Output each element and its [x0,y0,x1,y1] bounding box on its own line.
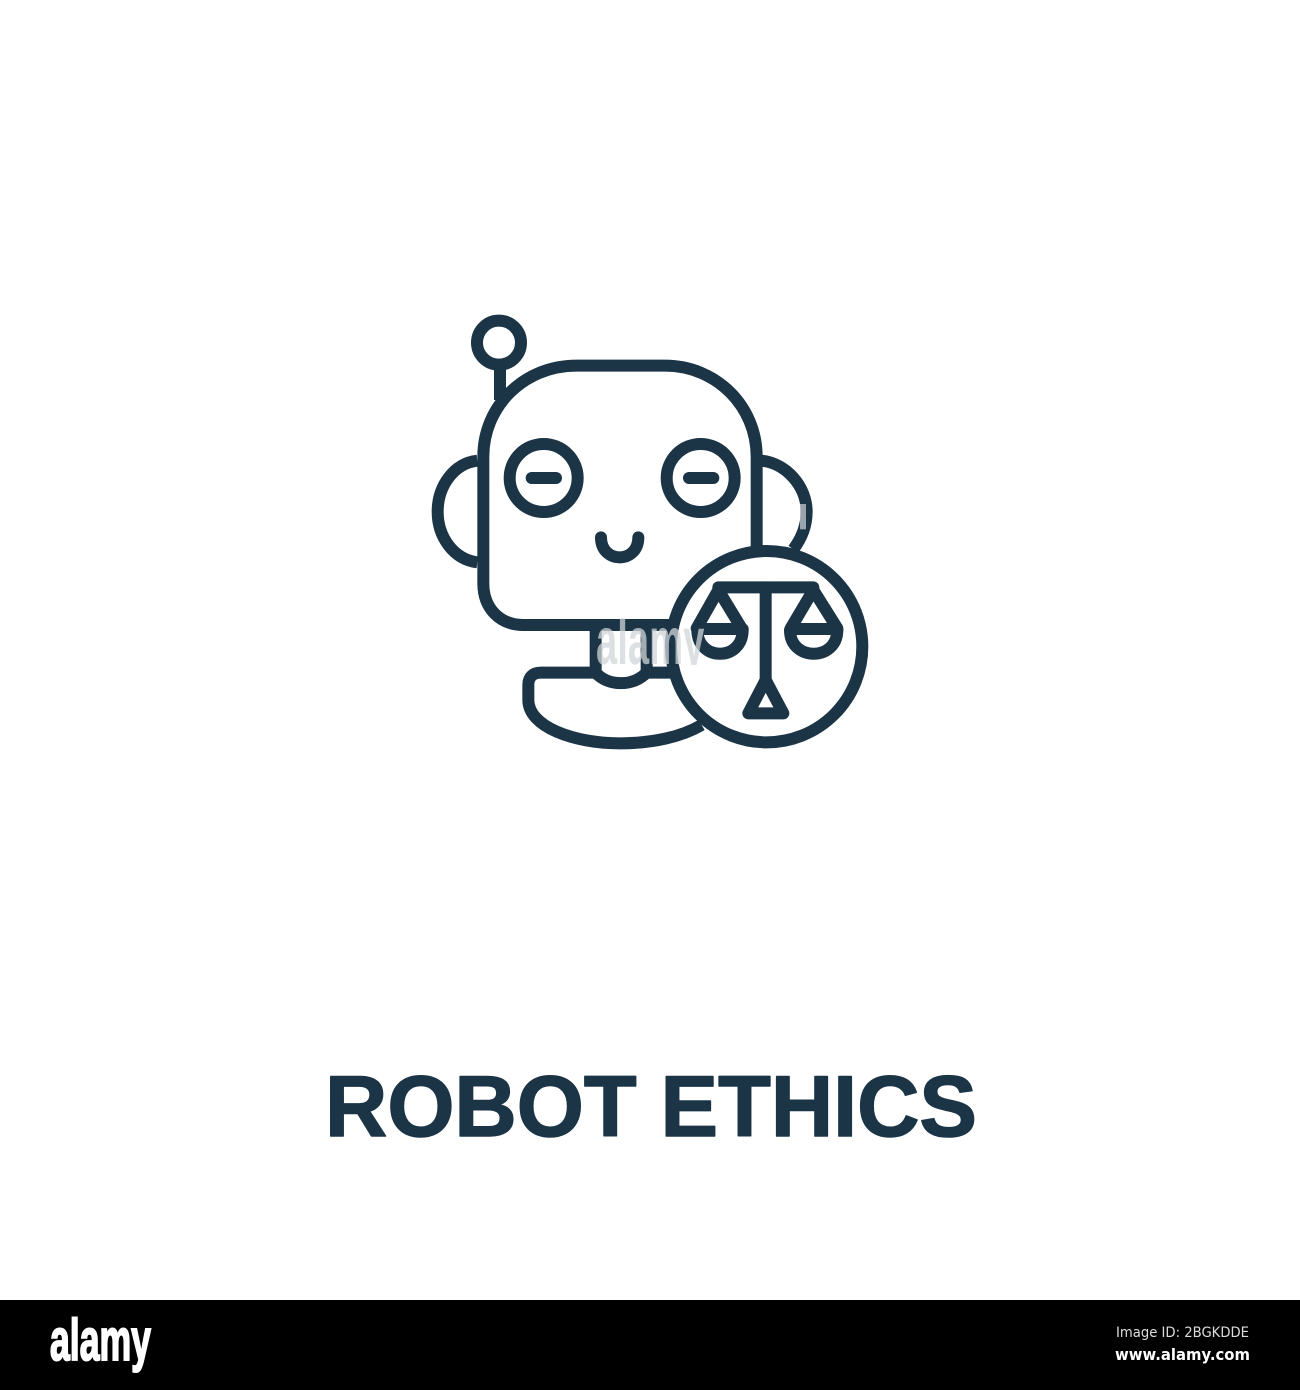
icon: robot ears [438,461,807,562]
icon: robot neck and base [528,630,702,743]
footer bar [0,1300,1300,1390]
icon: robot head [483,366,757,625]
icon: robot smile [601,537,638,557]
footer image id: Image ID: 2BGKDDE [1116,1325,1249,1341]
icon: robot antenna [477,321,521,400]
title: ROBOT ETHICS [325,1059,977,1155]
footer website: www.alamy.com [1115,1345,1250,1364]
icon: robot with scales of justice [438,321,862,743]
watermark fragment on ear [800,504,806,529]
watermark: alamy: alamy [596,605,704,679]
icon: robot eyes [510,444,735,512]
footer logo: alamy: alamy [50,1308,151,1373]
icon: justice circle [671,551,862,742]
icon: balance scales [697,587,837,713]
